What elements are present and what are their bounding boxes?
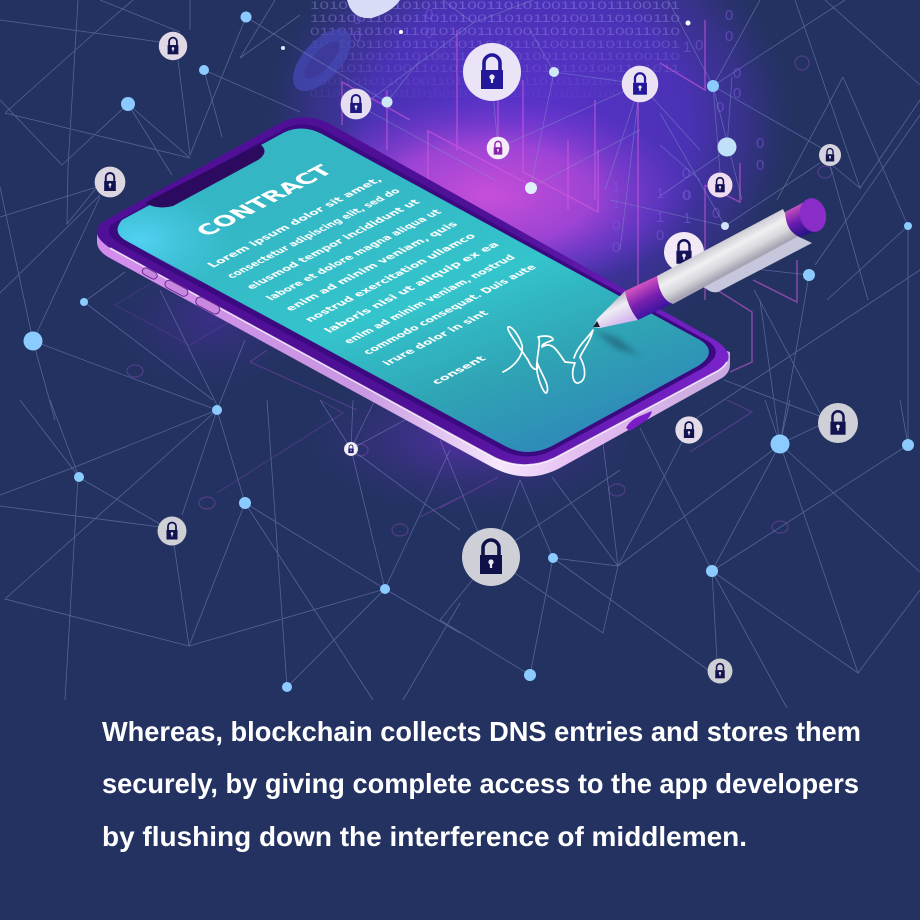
contract body text: labore et dolore magna aliqua ut [263, 207, 444, 302]
icon: lock [95, 167, 125, 197]
icon: lock [344, 442, 358, 456]
binary code rows: 1010011011010110100110101001101011100101 [310, 0, 680, 12]
binary code columns: 0 [682, 187, 690, 204]
icon: lock [158, 516, 186, 546]
binary code columns: 0 [725, 7, 733, 24]
pen tip cone [593, 291, 638, 328]
contract body text: enim ad minim veniam, nostrud [340, 253, 519, 346]
binary code rows [310, 0, 680, 100]
pen nib [593, 321, 600, 327]
phone buttons [141, 267, 221, 316]
icon: chain link [282, 0, 400, 101]
binary code columns: 0 [353, 11, 361, 28]
pen end [797, 196, 829, 234]
binary code columns: 0 [612, 217, 620, 234]
contract body text [204, 175, 602, 390]
binary code columns: 1 [683, 210, 691, 227]
binary code columns: 0 [425, 6, 433, 23]
phone [97, 117, 730, 477]
binary code columns: 0 [725, 28, 733, 45]
binary code columns: 0 [733, 65, 741, 82]
contract body text: consent [428, 354, 489, 386]
icon: lock [622, 66, 658, 102]
binary code columns: 1 [656, 185, 664, 202]
icon: lock [463, 43, 521, 101]
binary code rows: 0100110101101001101011010011010110100110 [310, 51, 680, 63]
binary code rows: 1101011010011010110100110101101001101011 [310, 63, 680, 75]
binary code columns: 0 [712, 205, 720, 222]
contract body text: laboris nisi ut aliquip ex ea [321, 240, 503, 335]
faint circuit shapes [115, 56, 832, 536]
notch [145, 144, 265, 207]
caption text: Whereas, blockchain collects DNS entries and stores them [102, 716, 861, 747]
binary code columns: 0 [756, 157, 764, 174]
pen cap [785, 198, 814, 237]
icon: lock [159, 32, 187, 60]
binary code columns [353, 6, 764, 256]
contract body text: nostrud exercitation ullamco [301, 231, 479, 324]
binary code rows: 1101001101011010100110101101001110100110 [310, 13, 680, 25]
binary code columns: 0 [756, 135, 764, 152]
binary code columns: 1 [656, 209, 664, 226]
binary code rows: 1001101011010011010110100110101101001101 [310, 76, 650, 88]
contract body text: Lorem ipsum dolor sit amet, [204, 175, 385, 269]
caption text [102, 716, 861, 852]
phone side edge [97, 230, 730, 477]
binary code columns: 1 [612, 179, 620, 196]
phone top surface [97, 117, 728, 465]
icon: lock [675, 416, 703, 444]
charging port [626, 411, 652, 431]
binary code columns: 1 [612, 195, 620, 212]
binary code columns: 0 [695, 37, 703, 54]
binary code columns: 0 [425, 25, 433, 42]
contract body text: consectetur adipiscing elit, sed do [224, 186, 404, 280]
contract body text: eiusmod tempor incididunt ut [243, 197, 423, 291]
caption text: securely, by giving complete access to the app developers [102, 768, 859, 799]
glow: violet and pink light behind phone [100, 0, 800, 520]
contract body text: commodo consequat. Duis aute [360, 263, 540, 356]
icon: lock [708, 659, 732, 683]
icon: lock [818, 403, 858, 443]
icon: lock [487, 137, 509, 159]
screen [118, 128, 709, 452]
pen shadow [594, 330, 640, 356]
icon: lock [462, 528, 520, 586]
contract heading: CONTRACT [190, 161, 339, 239]
contract body text: irure dolor in sint [379, 309, 492, 367]
binary code columns: 0 [683, 187, 691, 204]
binary code columns: 0 [733, 85, 741, 102]
binary code columns: 0 [656, 227, 664, 244]
network nodes [24, 12, 914, 692]
pen [593, 196, 829, 328]
binary code rows: 0110110100110101001101001101011010011010 [310, 26, 680, 38]
inner bezel [109, 124, 716, 456]
pink circuit lines [342, 20, 797, 372]
binary code columns: 1 [683, 39, 691, 56]
binary code columns: 1 [683, 230, 691, 247]
icon: lock [341, 89, 371, 119]
icon: lock [819, 144, 841, 166]
pen band [625, 276, 673, 320]
binary code columns: 0 [353, 28, 361, 45]
binary code columns: 0 [716, 99, 724, 116]
caption text: by flushing down the interference of middlemen. [102, 821, 747, 852]
binary code columns: 0 [612, 239, 620, 256]
contract body text: enim ad minim veniam, quis [282, 219, 462, 313]
icon: lock [664, 232, 704, 272]
signature [503, 327, 593, 393]
lock nodes [95, 32, 858, 683]
pen clip [700, 235, 812, 292]
icon: lock [708, 173, 732, 197]
binary code columns: 0 [682, 165, 690, 182]
edge highlight [110, 248, 727, 465]
binary code rows: 0110100110101101001101011010011010110100 [310, 88, 620, 100]
network lines [0, 0, 920, 708]
pen barrel [657, 209, 797, 304]
binary code rows: 1011001101011010011010110100110101101001 [310, 39, 680, 51]
